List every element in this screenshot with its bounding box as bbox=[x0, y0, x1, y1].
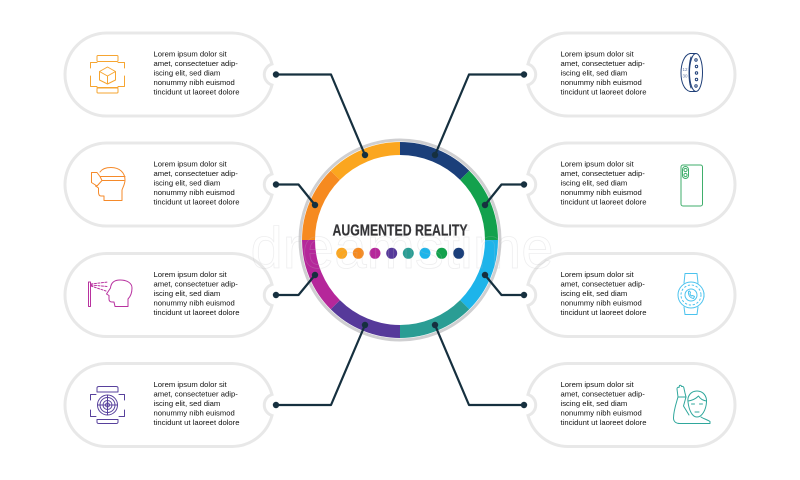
text block: nonummy nibh euismod bbox=[560, 298, 642, 308]
panel: second left card bbox=[65, 143, 272, 226]
text block: iscing elit, sed diam bbox=[560, 68, 627, 78]
center ring bbox=[300, 140, 500, 340]
text block: iscing elit, sed diam bbox=[154, 399, 220, 408]
text block: nonummy nibh euismod bbox=[154, 78, 235, 87]
text block: nonummy nibh euismod bbox=[560, 78, 642, 87]
text block: nonummy nibh euismod bbox=[154, 408, 235, 418]
text block: amet, consectetuer adip- bbox=[154, 59, 238, 68]
text block: tincidunt ut laoreet dolore bbox=[560, 198, 646, 206]
icon: VR headset head bbox=[92, 168, 125, 200]
connector: second right bbox=[482, 181, 527, 208]
connector: third right bbox=[482, 272, 527, 298]
panel: third left card bbox=[65, 254, 272, 336]
icon: target in frame bbox=[90, 386, 124, 424]
text block: nonummy nibh euismod bbox=[154, 298, 235, 308]
icon: fitness band bbox=[681, 54, 702, 92]
panel: second right card bbox=[528, 143, 735, 226]
text block: Lorem ipsum dolor sit bbox=[560, 380, 635, 389]
text block: iscing elit, sed diam bbox=[560, 289, 627, 298]
text block: iscing elit, sed diam bbox=[560, 178, 627, 188]
text block: nonummy nibh euismod bbox=[560, 408, 642, 418]
text block: amet, consectetuer adip- bbox=[154, 280, 238, 288]
legend dots bbox=[336, 248, 464, 259]
text block: iscing elit, sed diam bbox=[154, 178, 220, 188]
panel: bottom left card bbox=[65, 364, 272, 446]
text block: tincidunt ut laoreet dolore bbox=[154, 308, 239, 317]
text block: amet, consectetuer adip- bbox=[560, 59, 645, 68]
text block: iscing elit, sed diam bbox=[154, 68, 220, 78]
connector: top left bbox=[273, 71, 368, 158]
icon: smartphone back bbox=[681, 165, 702, 206]
text block: Lorem ipsum dolor sit bbox=[154, 50, 228, 58]
text block: amet, consectetuer adip- bbox=[154, 169, 238, 178]
text block: nonummy nibh euismod bbox=[154, 188, 235, 197]
text block: iscing elit, sed diam bbox=[154, 289, 220, 298]
panel: third right card bbox=[528, 254, 735, 336]
text block: Lorem ipsum dolor sit bbox=[560, 270, 635, 279]
connector: second left bbox=[273, 181, 318, 208]
text block: nonummy nibh euismod bbox=[560, 188, 642, 197]
text block: tincidunt ut laoreet dolore bbox=[560, 418, 646, 427]
icon: face scan bbox=[88, 280, 132, 306]
text block: tincidunt ut laoreet dolore bbox=[154, 198, 239, 206]
panel: top left card bbox=[65, 33, 272, 116]
text block: amet, consectetuer adip- bbox=[154, 390, 238, 398]
icon: fitness band: 30 bbox=[682, 74, 688, 78]
panel: bottom right card bbox=[528, 364, 735, 446]
panel: top right card bbox=[528, 33, 735, 116]
text block: amet, consectetuer adip- bbox=[560, 280, 645, 288]
icon: fitness band: 12 bbox=[682, 67, 688, 72]
connector: third left bbox=[273, 272, 318, 298]
title: AUGMENTED REALITY bbox=[332, 222, 468, 240]
text block: Lorem ipsum dolor sit bbox=[154, 160, 228, 168]
icon: person raising hand bbox=[674, 385, 710, 424]
text block: Lorem ipsum dolor sit bbox=[560, 160, 635, 168]
text block: Lorem ipsum dolor sit bbox=[560, 50, 635, 58]
text block: amet, consectetuer adip- bbox=[560, 390, 645, 398]
text block: amet, consectetuer adip- bbox=[560, 169, 645, 178]
text block: tincidunt ut laoreet dolore bbox=[560, 308, 646, 317]
text block: tincidunt ut laoreet dolore bbox=[154, 88, 239, 96]
text block: tincidunt ut laoreet dolore bbox=[154, 418, 239, 427]
text block: tincidunt ut laoreet dolore bbox=[560, 88, 646, 96]
icon: 3D cube in frame bbox=[90, 56, 124, 93]
icon: smartwatch bbox=[678, 274, 704, 314]
text block: iscing elit, sed diam bbox=[560, 399, 627, 408]
watermark: dreamstime bbox=[251, 216, 553, 281]
text block: Lorem ipsum dolor sit bbox=[154, 270, 228, 279]
connector: top right bbox=[432, 71, 527, 158]
text block: Lorem ipsum dolor sit bbox=[154, 380, 228, 389]
connector: bottom left bbox=[273, 322, 368, 408]
connector: bottom right bbox=[432, 322, 527, 408]
